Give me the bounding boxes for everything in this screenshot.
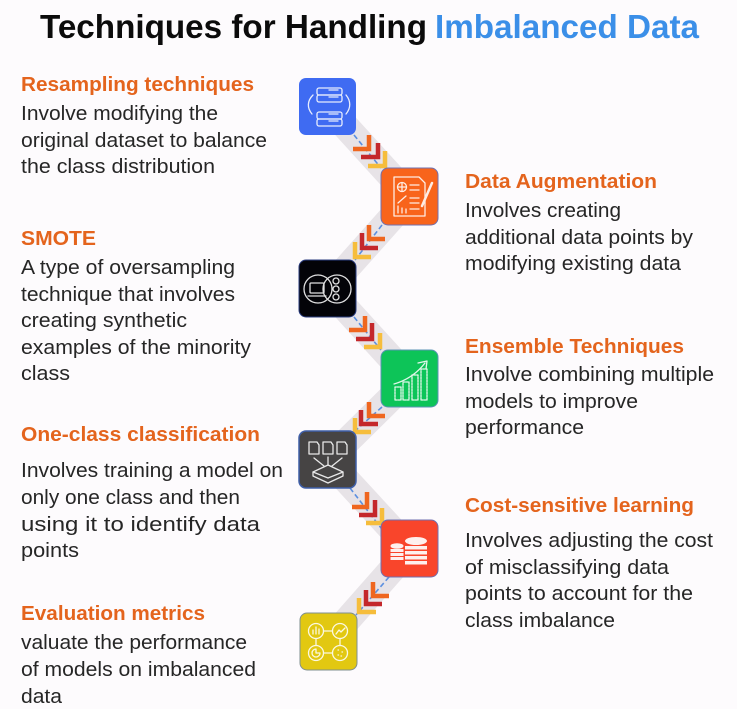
title [40,8,700,45]
text block: SMOTE: examples of the minority [21,337,251,359]
arrow: chevrons ensemble to one-class [355,402,385,432]
icon: evaluation metrics dashboard [300,613,357,670]
text block: one-class classification: points [21,540,79,562]
text block: data augmentation: additional data points by [465,227,693,249]
text block: evaluation metrics: valuate the performance [21,632,247,654]
title: Imbalanced Data [435,8,700,45]
arrow: chevrons resampling to augmentation [353,135,385,166]
icon: data augmentation document [381,168,438,225]
arrow: chevrons augmentation to SMOTE [355,225,385,257]
text block: ensemble techniques [465,336,714,439]
text block: evaluation metrics [21,603,256,708]
text block: evaluation metrics: of models on imbalanced [21,659,256,681]
text block: SMOTE [21,228,251,385]
text block: one-class classification: One-class classification [21,424,260,446]
text block: evaluation metrics: data [21,686,63,708]
icon: one-class documents and tray [299,431,356,488]
arrow: chevrons SMOTE to ensemble [349,316,380,347]
text block: resampling techniques: the class distribution [21,156,215,178]
title: Techniques for Handling [40,8,427,45]
text block: resampling techniques: Resampling techniques [21,74,254,96]
text block: cost-sensitive learning: of misclassifying data [465,557,670,579]
arrow: chevrons one-class to cost-sensitive [352,492,382,523]
text block: evaluation metrics: Evaluation metrics [21,603,205,625]
text block: SMOTE: class [21,363,70,385]
text block: SMOTE: SMOTE [21,228,96,250]
text block: ensemble techniques: Involve combining multiple [465,364,714,386]
text block: cost-sensitive learning [465,495,713,632]
icon: resampling servers [299,78,356,135]
text block: resampling techniques [21,74,267,178]
text block: SMOTE: A type of oversampling [21,257,235,279]
icon: SMOTE overlapping circles [299,260,356,317]
icon: cost-sensitive coins [381,520,438,577]
text block: one-class classification: only one class and then [21,487,240,509]
text block: one-class classification [21,424,283,562]
text block: SMOTE: creating synthetic [21,310,187,332]
text block: cost-sensitive learning: class imbalance [465,610,615,632]
text block: cost-sensitive learning: Cost-sensitive learning [465,495,694,517]
text block: ensemble techniques: Ensemble Techniques [465,336,684,358]
text block: ensemble techniques: performance [465,417,584,439]
text block: data augmentation [465,171,693,275]
text block: one-class classification: Involves training a model on [21,460,283,482]
text block: data augmentation: modifying existing data [465,253,682,275]
arrow: chevrons cost-sensitive to evaluation [359,582,389,612]
dashed connector lines [350,135,389,615]
text block: cost-sensitive learning: points to account for the [465,583,693,605]
text block: data augmentation: Data Augmentation [465,171,657,193]
zigzag connector bands [328,107,410,642]
text block: data augmentation: Involves creating [465,200,621,222]
text block: one-class classification: using it to identify data [21,514,261,536]
text block: ensemble techniques: models to improve [465,391,638,413]
icon: ensemble growth chart [381,350,438,407]
text block: SMOTE: technique that involves [21,284,235,306]
text block: resampling techniques: Involve modifying the [21,103,218,125]
text block: resampling techniques: original dataset to balance [21,130,267,152]
text block: cost-sensitive learning: Involves adjusting the cost [465,530,713,552]
